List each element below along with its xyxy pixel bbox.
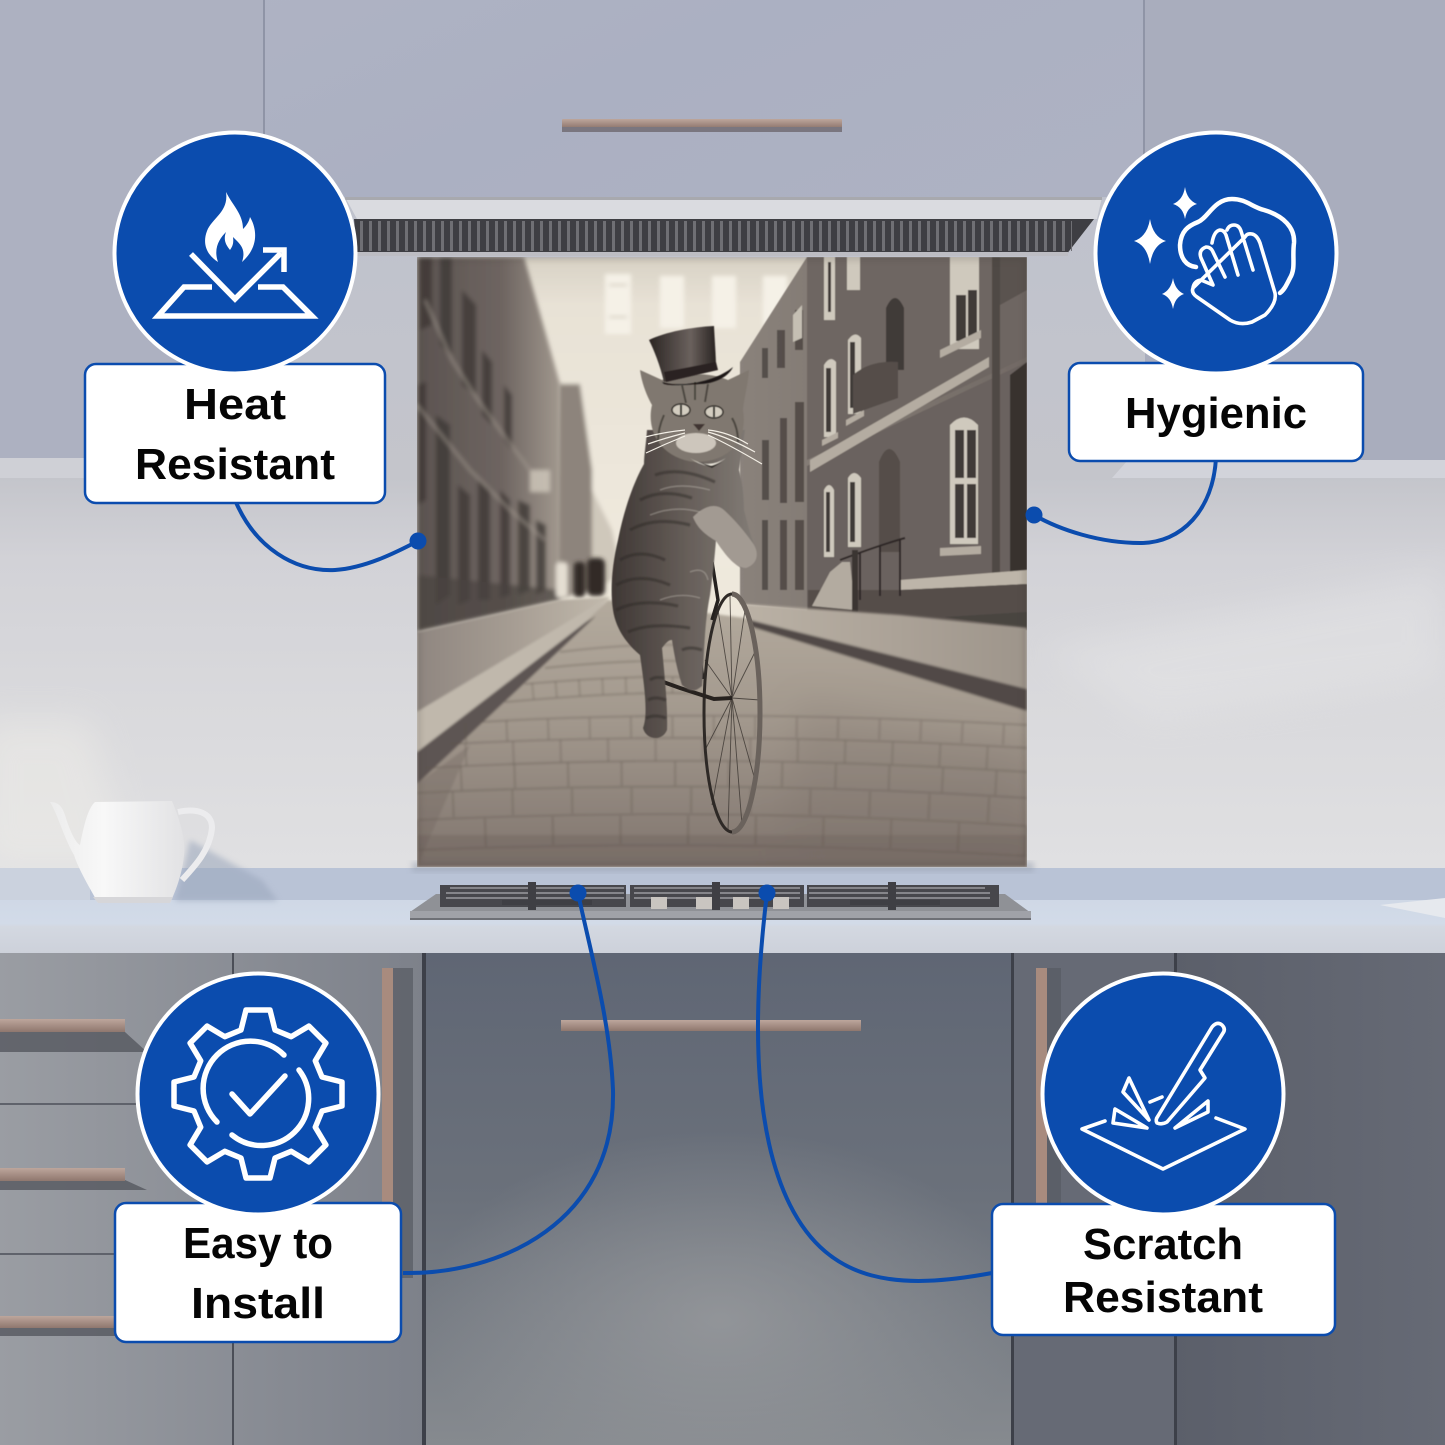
splashback photo: cat on a penny-farthing — [417, 257, 1027, 867]
callout: scratch resistant — [758, 884, 1335, 1335]
left street buildings — [417, 257, 605, 632]
label box — [115, 1203, 401, 1342]
label box — [85, 364, 385, 503]
connector line — [235, 500, 418, 570]
connector line — [758, 893, 992, 1281]
connector dot — [570, 884, 586, 902]
road and pavements — [417, 597, 1027, 867]
label text second line: Install — [191, 1279, 325, 1328]
penny-farthing wheel — [655, 562, 760, 832]
cooker hood — [345, 197, 1102, 256]
lower cabinets — [0, 953, 1445, 1445]
cobblestones — [422, 644, 1026, 826]
callout: easy to install — [115, 884, 613, 1342]
connector dot — [1026, 506, 1042, 524]
teapot — [50, 801, 278, 903]
upper cabinet handle — [562, 119, 842, 132]
label text: Scratch — [1083, 1220, 1243, 1269]
label box — [992, 1204, 1335, 1335]
connector line — [1034, 458, 1216, 543]
callout: hygienic — [1026, 130, 1363, 543]
callout: heat resistant — [85, 130, 426, 570]
icon: flame on reflective surface — [112, 130, 358, 376]
connector dot — [410, 532, 426, 550]
label text: Hygienic — [1125, 389, 1307, 438]
icon: knife scratching a surface — [1040, 972, 1286, 1216]
connector line — [403, 893, 613, 1273]
cat body and legs — [612, 370, 757, 738]
panel shadow — [412, 862, 1034, 872]
icon: gear with check mark — [136, 972, 380, 1216]
photo vignette — [417, 257, 1027, 867]
sky and distant buildings — [417, 257, 806, 619]
cabinet handles — [0, 968, 1061, 1336]
tiled wall — [0, 196, 1445, 868]
upper cabinets — [0, 0, 1445, 478]
gas hob — [410, 882, 1031, 920]
label text: Easy to — [183, 1219, 333, 1268]
label text: Heat — [184, 380, 286, 429]
connector dot — [758, 884, 776, 902]
label text second line: Resistant — [1063, 1273, 1263, 1322]
label text second line: Resistant — [135, 440, 335, 489]
worktop — [0, 868, 1445, 953]
right street buildings — [740, 257, 1027, 630]
icon: hand wiping with sparkles — [1094, 130, 1338, 376]
top hat — [649, 326, 733, 385]
whiskers — [645, 430, 762, 464]
label box — [1069, 363, 1363, 461]
